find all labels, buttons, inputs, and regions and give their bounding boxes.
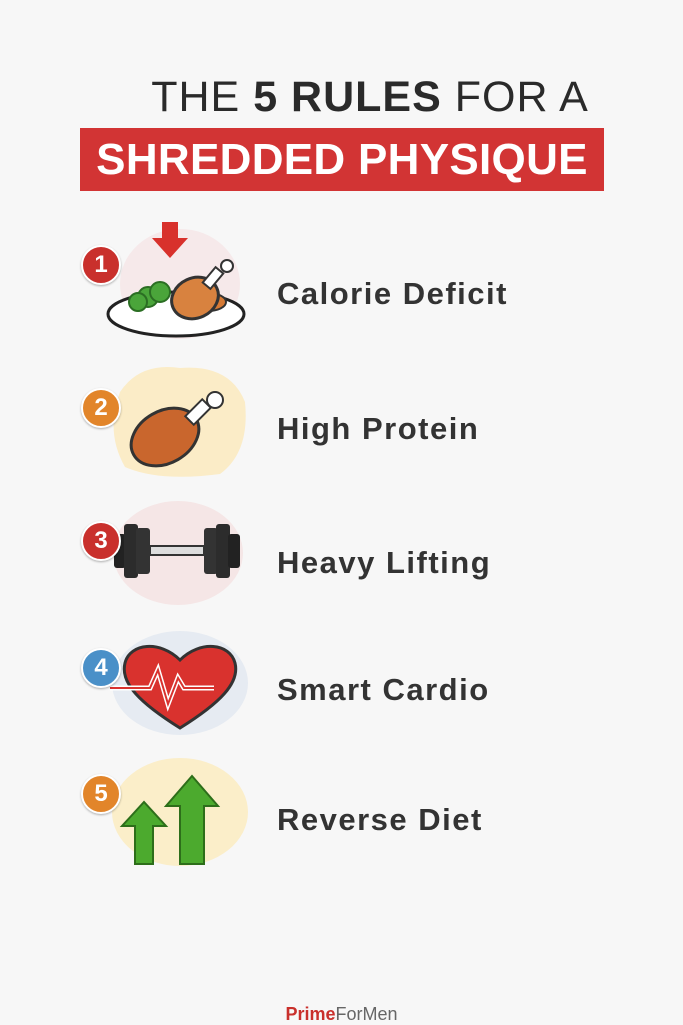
badge 3: [81, 521, 121, 561]
badge 4: [81, 648, 121, 688]
badge 5: 5: [94, 780, 108, 807]
badge 2: 2: [94, 394, 108, 421]
rule 4: [80, 631, 490, 735]
badge 5: [81, 774, 121, 814]
label 4: Smart Cardio: [277, 672, 490, 707]
badge 1: 1: [94, 251, 108, 278]
rule 1: [80, 222, 508, 339]
rule 2: [80, 367, 479, 477]
label 2: High Protein: [277, 411, 479, 446]
icon: chicken drumstick: [114, 367, 246, 477]
icon: up arrows: [112, 758, 248, 866]
badge 2: [81, 388, 121, 428]
icon: plate with chicken: [106, 222, 246, 339]
badge 1: [81, 245, 121, 285]
icon: dumbbell: [114, 501, 243, 605]
footer brand: PrimeForMen: [285, 1004, 398, 1024]
label 1: Calorie Deficit: [277, 276, 508, 311]
label 5: Reverse Diet: [277, 802, 483, 837]
title banner: SHREDDED PHYSIQUE: [96, 135, 588, 184]
rule 5: [80, 758, 483, 866]
icon: heart with pulse: [110, 631, 248, 735]
label 3: Heavy Lifting: [277, 545, 491, 580]
rule 3: [80, 501, 491, 605]
badge 4: 4: [94, 654, 108, 681]
badge 3: 3: [94, 527, 108, 554]
title line 1: THE 5 RULES FOR A: [151, 73, 589, 121]
